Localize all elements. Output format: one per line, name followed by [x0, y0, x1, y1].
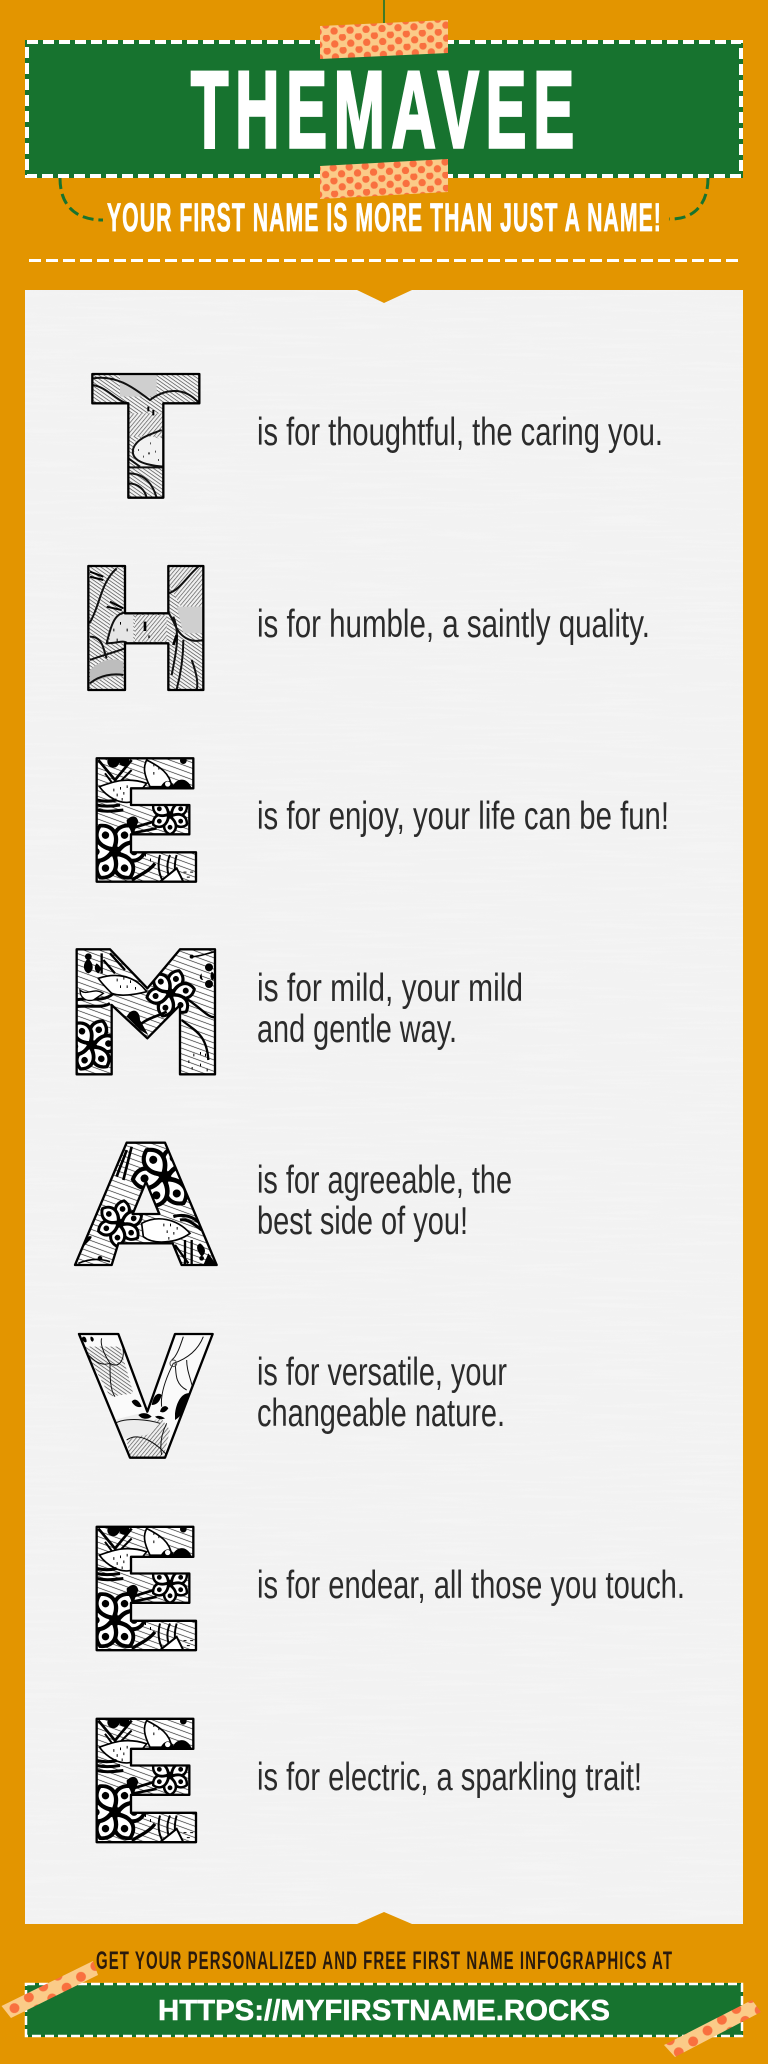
text: V: changeable nature. — [257, 1392, 505, 1435]
letter M — [76, 948, 216, 1076]
letter A — [73, 1130, 220, 1267]
header hanging thread — [383, 0, 385, 24]
footer URL banner — [25, 1983, 743, 2037]
title banner — [25, 40, 743, 178]
subtitle: YOUR FIRST NAME IS MORE THAN JUST A NAME! — [107, 195, 661, 240]
text: M — [257, 967, 523, 1051]
letter E (row 8) — [70, 1716, 200, 1856]
text: A — [257, 1159, 512, 1243]
text: A: best side of you! — [257, 1200, 468, 1243]
text: V: is for versatile, your — [257, 1351, 507, 1394]
text: M: is for mild, your mild — [257, 967, 523, 1010]
panel: letters — [25, 290, 743, 1924]
tape: bottom of banner — [320, 159, 448, 199]
footer call to action: GET YOUR PERSONALIZED AND FREE FIRST NAME INFOGRAPHICS AT — [96, 1947, 672, 1975]
tape: footer right — [664, 2000, 761, 2057]
text: A: is for agreeable, the — [257, 1159, 512, 1202]
text: V — [257, 1351, 507, 1435]
URL: HTTPS://MYFIRSTNAME.ROCKS — [158, 1995, 610, 2027]
dashed divider — [29, 259, 739, 262]
left bracket — [60, 178, 103, 220]
letter H — [87, 563, 207, 693]
title: THEMAVEE — [191, 48, 574, 170]
tape: footer left — [2, 1961, 98, 2018]
letter T — [90, 370, 203, 500]
text: E: is for electric, a sparkling trait! — [257, 1756, 642, 1799]
text: M: and gentle way. — [257, 1008, 457, 1051]
text: H: is for humble, a saintly quality. — [257, 603, 650, 646]
right bracket — [669, 178, 708, 219]
letter E (row 7) — [70, 1524, 200, 1664]
letter E (row 3) — [70, 755, 200, 896]
letter V — [77, 1332, 217, 1460]
tape: top — [320, 20, 448, 59]
